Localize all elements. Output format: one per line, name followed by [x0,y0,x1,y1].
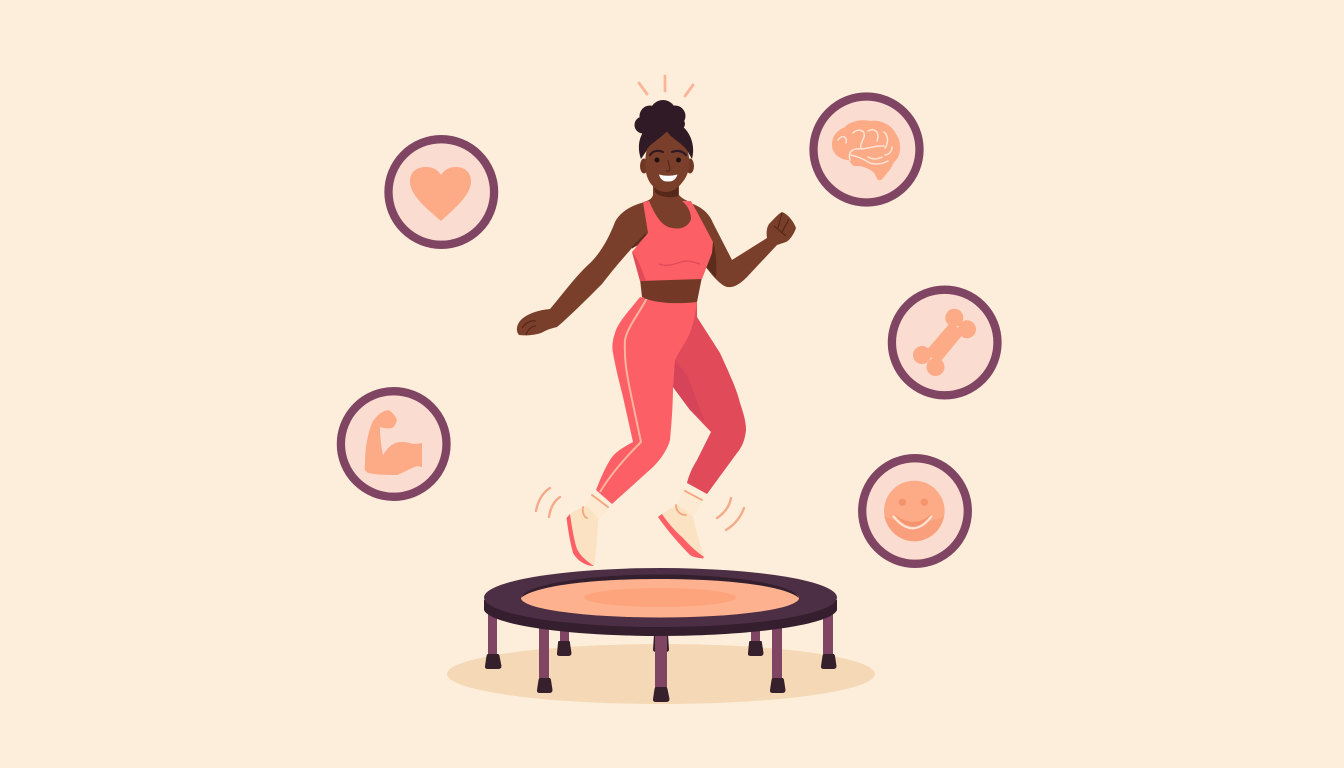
back leg [673,300,746,494]
ground shadow [447,644,875,704]
nose [666,160,670,171]
left sock and shoe [566,493,610,566]
frame rim [484,600,837,636]
eyes [654,158,660,162]
face [645,132,689,192]
energy lines [639,76,693,96]
mat centre [584,588,736,607]
trampoline [484,568,837,702]
right arm [690,203,796,287]
badge: brain [814,96,920,202]
top side shade [632,252,646,281]
front legs [485,610,836,702]
badge: smiley [862,458,968,564]
left hand fingers [522,321,536,335]
badge: muscle [341,391,447,497]
head [634,100,694,192]
badge: bone [892,290,998,395]
hair cap [639,120,693,159]
woman jumping [517,76,796,566]
neck shadow [654,186,678,197]
fist detail [774,213,789,236]
smile [659,174,678,182]
back legs [557,628,764,656]
brain folds [838,130,892,164]
front leg [596,297,697,504]
sports top [632,201,713,281]
ears [640,158,648,174]
underarm crease [632,234,646,248]
inner thigh shade [673,360,705,422]
top band crease [659,261,700,265]
jump mat [521,578,799,618]
arm shadow [706,241,716,278]
eyebrows [650,151,686,155]
badge: heart [388,139,494,245]
leggings side stripe [600,298,647,492]
midriff [640,277,702,303]
neck and chest [640,180,704,240]
hair bun [634,100,686,135]
left arm [517,202,652,335]
right sock and shoe [658,488,704,558]
motion arcs [536,488,744,530]
